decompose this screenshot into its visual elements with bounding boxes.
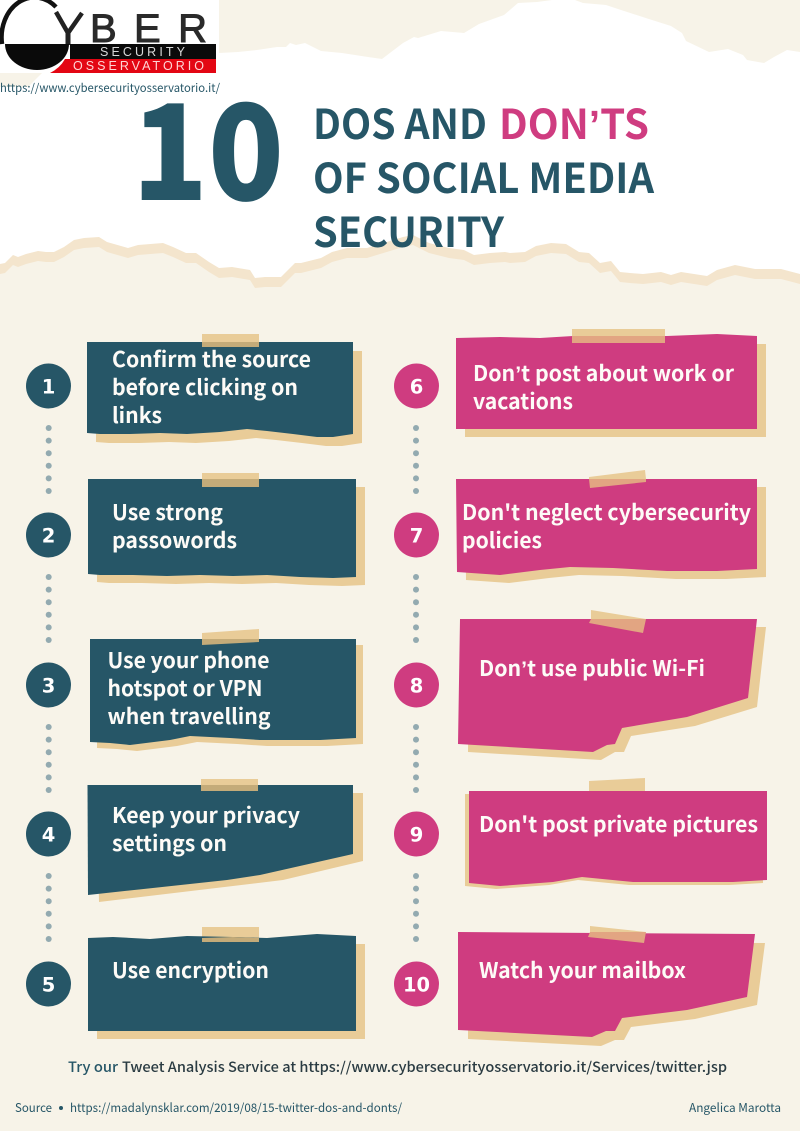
panel: don't 8: Don’t use public Wi-Fi bbox=[479, 652, 705, 683]
author credit: Angelica Marotta bbox=[689, 1099, 781, 1116]
panel: don't 10 bbox=[394, 926, 765, 1046]
logo: Cyber Security Osservatorio bbox=[0, 0, 219, 73]
panel: do 4: Keep your privacy bbox=[112, 799, 301, 830]
panel: don't 8 bbox=[394, 610, 766, 760]
panel: do 1: Confirm the source bbox=[112, 343, 311, 374]
title bbox=[313, 91, 655, 259]
panel: don't 7: Don't neglect cybersecurity bbox=[462, 496, 752, 527]
logo: Cyber Security Osservatorio: OSSERVATORIO bbox=[73, 59, 204, 73]
panel: don't 10: 10 bbox=[403, 974, 430, 996]
panel: do 3: when travelling bbox=[108, 700, 271, 731]
panel: do 1: before clicking on bbox=[112, 371, 298, 402]
panel: don't 6: vacations bbox=[473, 385, 573, 416]
footer call to action: Tweet Analysis Service at https://www.cybersecurityosservatorio.it/Services/twitter.jsp bbox=[122, 1057, 727, 1077]
title: OF SOCIAL MEDIA bbox=[313, 145, 655, 205]
panel: don't 9 bbox=[394, 778, 767, 889]
panel: don't 10: Watch your mailbox bbox=[479, 954, 686, 985]
source line: Source bbox=[15, 1099, 52, 1116]
panel: do 4: 4 bbox=[42, 824, 55, 846]
panel: do 2: passowords bbox=[112, 524, 237, 555]
panel: do 3: Use your phone bbox=[108, 644, 270, 675]
panel: do 2 bbox=[26, 473, 365, 586]
panel: do 5 bbox=[26, 927, 365, 1039]
title: DOS AND bbox=[313, 91, 487, 151]
dotted connectors bbox=[46, 425, 419, 942]
panel: do 4: settings on bbox=[112, 827, 227, 858]
panel: do 3 bbox=[26, 629, 363, 751]
title: SECURITY bbox=[313, 199, 505, 259]
logo: Cyber Security Osservatorio: BER bbox=[90, 7, 207, 51]
panel: don't 7: 7 bbox=[410, 524, 423, 548]
panel: don't 6: 6 bbox=[410, 376, 423, 398]
panel: do 2: Use strong bbox=[112, 496, 223, 527]
panel: don't 7 bbox=[394, 470, 766, 583]
panel: do 3: hotspot or VPN bbox=[108, 672, 262, 703]
website link: https://www.cybersecurityosservatorio.it/ bbox=[0, 80, 220, 96]
panel: do 3: 3 bbox=[42, 674, 55, 698]
panel: do 5: Use encryption bbox=[112, 954, 269, 985]
panel: don't 6: Don’t post about work or bbox=[473, 357, 735, 388]
panel: do 1: 1 bbox=[42, 376, 55, 398]
source line: https://madalynsklar.com/2019/08/15-twitter-dos-and-donts/ bbox=[70, 1099, 402, 1116]
panel: don't 8: 8 bbox=[410, 674, 423, 698]
panel: don't 9: 9 bbox=[410, 824, 423, 846]
panel: don't 7: policies bbox=[462, 524, 542, 555]
big number 10: 10 bbox=[132, 47, 284, 239]
title: DON’TS bbox=[499, 91, 649, 151]
panel: do 2: 2 bbox=[42, 524, 55, 548]
panel: do 1: links bbox=[112, 399, 162, 430]
panel: don't 9: Don't post private pictures bbox=[479, 808, 758, 839]
panel: don't 6 bbox=[394, 329, 766, 437]
logo: Cyber Security Osservatorio: SECURITY bbox=[100, 45, 186, 59]
footer call to action: Try our bbox=[68, 1057, 118, 1077]
panel: do 5: 5 bbox=[42, 974, 55, 996]
panel: do 4 bbox=[26, 779, 363, 902]
panel: do 1 bbox=[26, 334, 362, 446]
torn white header paper bbox=[0, 0, 800, 320]
